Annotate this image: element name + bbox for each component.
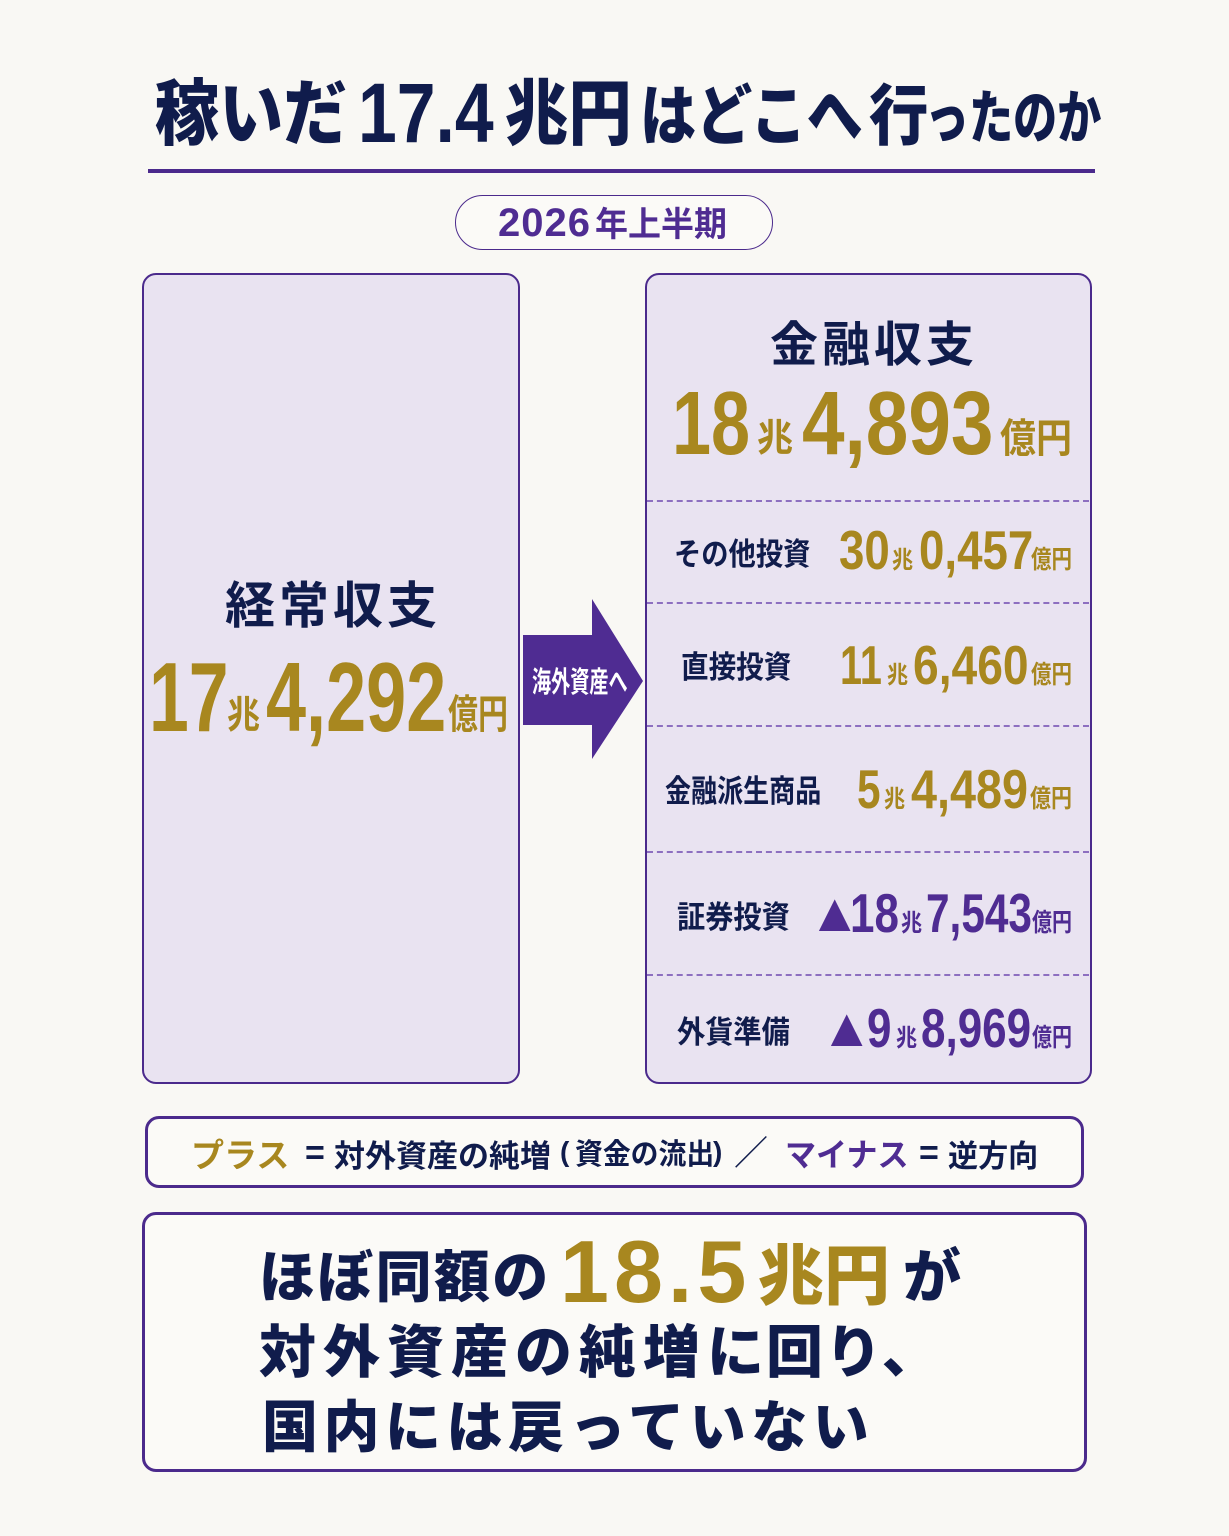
row: reserves: 8,969 xyxy=(921,997,1031,1059)
conclusion line 1: が xyxy=(903,1245,961,1310)
legend box: = xyxy=(305,1134,325,1172)
value: current account xyxy=(149,642,508,752)
title: 17.4 xyxy=(358,66,494,160)
conclusion line 1: 18.5 xyxy=(560,1222,751,1320)
title: 稼いだ xyxy=(155,75,347,155)
period pill: 2026 xyxy=(498,201,591,245)
row: direct investment: 6,460 xyxy=(913,634,1029,696)
row: reserves: 9 xyxy=(867,997,891,1059)
conclusion line 2: 対外資産の純増に回り、 xyxy=(259,1321,941,1385)
row: derivatives: 金融派生商品 xyxy=(665,774,821,809)
row: reserves: ▲ xyxy=(820,998,873,1058)
title underline xyxy=(148,169,1095,173)
row: direct investment xyxy=(681,634,1072,696)
arrow: to overseas assets xyxy=(523,599,643,759)
row: derivatives: 億円 xyxy=(1030,785,1072,813)
title: はどこへ xyxy=(640,79,863,153)
row: portfolio investment: ▲ xyxy=(808,883,861,943)
legend box xyxy=(145,1116,1084,1188)
conclusion line 1 xyxy=(259,1222,961,1320)
value: financial account: 18 xyxy=(672,374,750,474)
title: 兆円 xyxy=(505,75,632,155)
row: derivatives: 5 xyxy=(857,758,881,820)
value: financial account: 億円 xyxy=(1000,417,1072,461)
conclusion line 1: ほぼ同額の xyxy=(259,1246,550,1309)
title xyxy=(155,66,1101,160)
value: current account: 17 xyxy=(149,642,229,752)
row: derivatives: 4,489 xyxy=(911,758,1028,820)
legend box: プラス xyxy=(191,1137,289,1174)
panel: financial account xyxy=(645,273,1092,1084)
row: other investment: その他投資 xyxy=(674,537,810,572)
row: reserves: 外貨準備 xyxy=(677,1015,790,1050)
row: derivatives: 兆 xyxy=(884,786,905,813)
row: other investment: 億円 xyxy=(1031,546,1072,574)
period pill xyxy=(455,195,773,250)
conclusion line 1: 兆円 xyxy=(758,1238,890,1312)
title: 行 xyxy=(869,78,928,152)
legend box: マイナス xyxy=(785,1137,909,1173)
row: reserves xyxy=(677,997,1072,1059)
row: reserves: 億円 xyxy=(1032,1024,1072,1052)
row: other investment: 兆 xyxy=(892,547,913,574)
legend box: 逆方向 xyxy=(948,1139,1038,1174)
arrow label: 海外資産へ xyxy=(532,667,628,699)
row: reserves: 兆 xyxy=(896,1025,917,1052)
value: financial account: 兆 xyxy=(757,418,793,460)
row: portfolio investment: 億円 xyxy=(1032,909,1072,937)
row: portfolio investment: 証券投資 xyxy=(677,900,790,935)
value: current account: 兆 xyxy=(227,695,260,737)
row: other investment: 30 xyxy=(839,519,890,581)
row: portfolio investment: 7,543 xyxy=(926,882,1032,944)
value: current account: 億円 xyxy=(448,693,508,737)
conclusion line 3: 国内には戻っていない xyxy=(262,1396,874,1459)
row: portfolio investment xyxy=(677,882,1072,944)
value: financial account: 4,893 xyxy=(802,374,993,474)
row: portfolio investment: 18 xyxy=(850,882,899,944)
heading: financial account: 金融収支 xyxy=(770,319,978,372)
row: derivatives xyxy=(665,758,1072,820)
legend box: 対外資産の純増 xyxy=(334,1139,551,1174)
row: portfolio investment: 兆 xyxy=(901,910,922,937)
legend box: = xyxy=(919,1134,939,1172)
legend box: ) xyxy=(713,1136,722,1167)
row: direct investment: 11 xyxy=(840,634,882,696)
conclusion box xyxy=(142,1212,1087,1472)
title: ったのか xyxy=(925,86,1101,151)
row: other investment xyxy=(674,519,1072,581)
value: financial account xyxy=(672,374,1072,474)
legend box: ( xyxy=(560,1136,569,1167)
panel: current account xyxy=(142,273,520,1084)
row: direct investment: 直接投資 xyxy=(681,650,791,685)
row: other investment: 0,457 xyxy=(919,519,1033,581)
legend box: 資金の流出 xyxy=(575,1139,714,1171)
legend box: ／ xyxy=(734,1135,768,1173)
period pill: 年上半期 xyxy=(594,206,726,244)
value: current account: 4,292 xyxy=(266,642,446,752)
row: direct investment: 兆 xyxy=(887,662,908,688)
row: direct investment: 億円 xyxy=(1031,660,1072,688)
heading: current account: 経常収支 xyxy=(225,578,441,634)
